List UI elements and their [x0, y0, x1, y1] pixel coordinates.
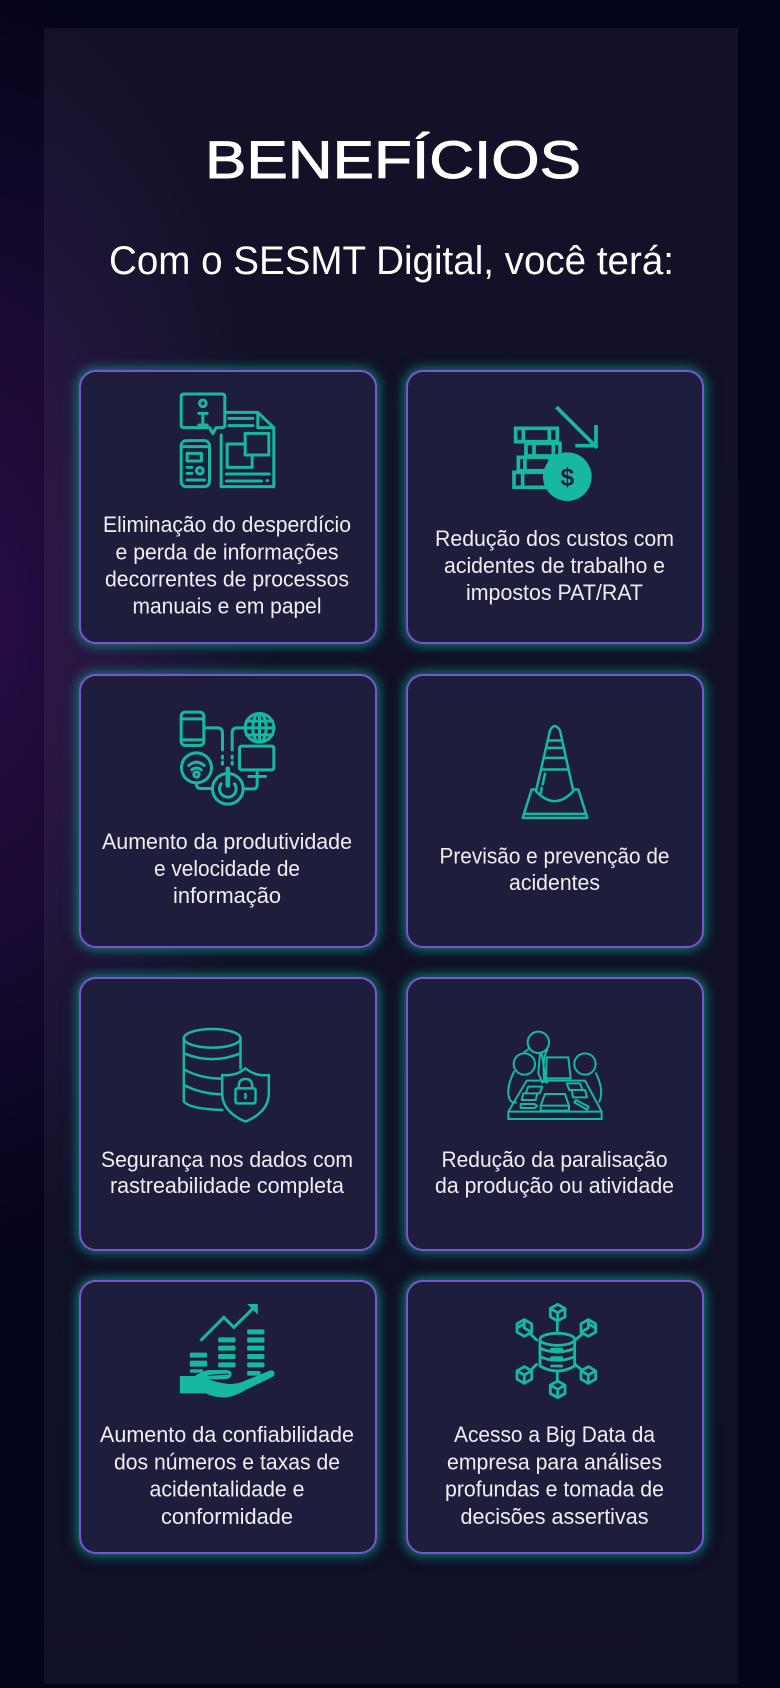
text: benefit 8: decisões assertivas	[460, 1504, 648, 1529]
text: benefit 5	[100, 1147, 352, 1198]
icon: hand with growing coins	[179, 1304, 274, 1397]
text: benefit 3: Aumento da produtividade	[102, 828, 352, 854]
text: benefit 8: Acesso a Big Data da	[454, 1422, 655, 1447]
panel: card 1	[78, 370, 376, 644]
text: benefit 2: acidentes de trabalho e	[444, 553, 665, 578]
text: benefit 2	[435, 526, 674, 605]
icon: information and documents	[181, 394, 273, 487]
text: benefit 4: acidentes	[509, 870, 600, 894]
text: benefit 1: manuais e em papel	[132, 594, 321, 619]
text: benefit 1: e perda de informações	[115, 539, 338, 564]
text: benefit 7	[100, 1422, 354, 1529]
title: BENEFÍCIOS	[205, 131, 581, 190]
text: benefit 1	[102, 512, 350, 619]
icon: protected database	[183, 1029, 268, 1122]
text: benefit 4: Previsão e prevenção de	[440, 843, 670, 868]
icon: big data network	[517, 1304, 596, 1398]
icon: team meeting	[508, 1032, 602, 1119]
text: benefit 7: dos números e taxas de	[114, 1449, 340, 1474]
icon: falling costs: $	[560, 464, 574, 491]
panel: card 7	[78, 1280, 376, 1554]
icon: connected devices	[181, 712, 273, 804]
icon: falling costs	[514, 408, 596, 501]
text: benefit 5: rastreabilidade completa	[110, 1173, 344, 1198]
panel: card 8	[406, 1280, 704, 1554]
text: benefit 1: decorrentes de processos	[104, 567, 348, 592]
text: benefit 2: Redução dos custos com	[435, 526, 674, 551]
icon: traffic cone	[523, 726, 587, 817]
text: benefit 3: informação	[172, 882, 280, 908]
panel: card 4	[406, 674, 704, 948]
subtitle: Com o SESMT Digital, você terá:	[109, 239, 674, 283]
text: benefit 4	[440, 843, 670, 894]
text: benefit 3: e velocidade de	[154, 856, 300, 880]
text: benefit 7: conformidade	[160, 1504, 292, 1529]
text: benefit 2: impostos PAT/RAT	[466, 580, 643, 605]
text: benefit 3	[102, 828, 352, 908]
text: benefit 5: Segurança nos dados com	[100, 1147, 352, 1172]
text: benefit 6: Redução da paralisação	[442, 1147, 668, 1172]
text: benefit 8: empresa para análises	[447, 1449, 662, 1474]
text: benefit 7: acidentalidade e	[149, 1477, 304, 1502]
text: benefit 8: profundas e tomada de	[445, 1477, 664, 1502]
header	[109, 131, 674, 283]
text: benefit 8	[445, 1422, 664, 1529]
panel: card 3	[78, 674, 376, 948]
text: benefit 6	[435, 1147, 674, 1198]
panel: card 6	[406, 977, 704, 1251]
text: benefit 7: Aumento da confiabilidade	[100, 1422, 354, 1447]
panel: card 5	[78, 977, 376, 1251]
text: benefit 1: Eliminação do desperdício	[102, 512, 350, 537]
text: benefit 6: da produção ou atividade	[435, 1173, 674, 1198]
panel: card 2	[406, 370, 704, 644]
